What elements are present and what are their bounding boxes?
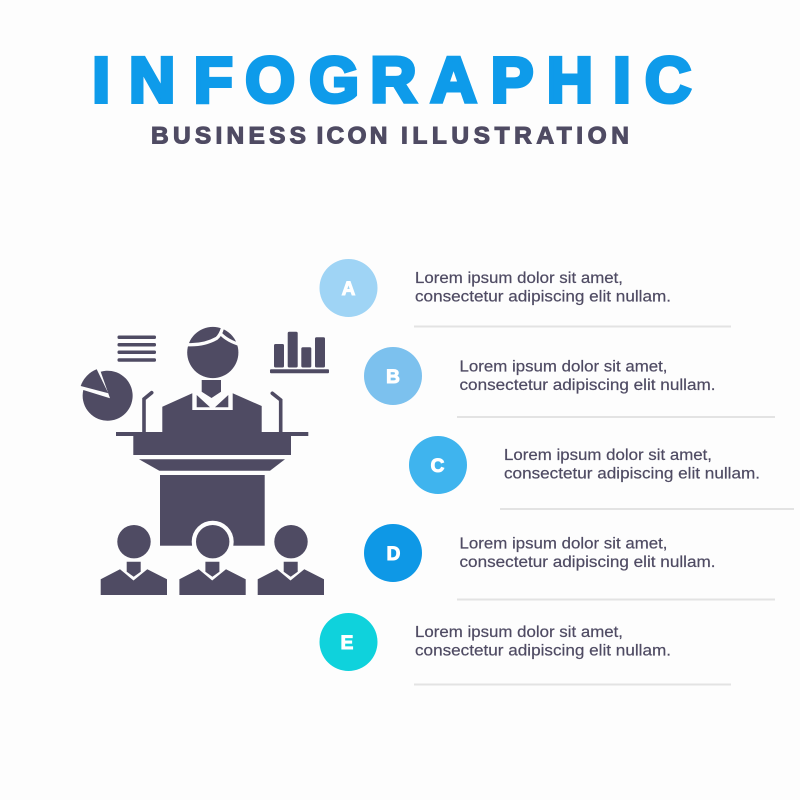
text E: Lorem ipsum dolor sit amet, [415,624,623,641]
text C: Lorem ipsum dolor sit amet, [504,447,712,464]
item E [320,613,731,686]
badge E: E [341,633,353,654]
icon: audience member right [258,525,324,595]
badge C: C [431,456,445,477]
badge A: A [342,279,356,300]
badge D [364,524,422,582]
text D [460,536,716,571]
badge C [409,436,467,494]
badge B [364,347,422,405]
badge B: B [386,367,400,388]
badge D: D [387,544,400,565]
text B: Lorem ipsum dolor sit amet, [460,358,668,376]
text A: Lorem ipsum dolor sit amet, [415,270,623,287]
text E: consectetur adipiscing elit nullam. [415,642,671,660]
text C: consectetur adipiscing elit nullam. [504,466,760,482]
icon: podium [116,432,308,546]
icon: pie chart [81,369,133,421]
icon: audience member left [101,525,167,595]
subtitle: ICON [316,122,388,150]
item D [364,524,775,600]
icon: business speaker at podium with audience [81,327,329,595]
text C [504,447,760,482]
text E [415,624,671,660]
item A [320,259,731,328]
title: INFOGRAPHIC [92,44,691,116]
icon: audience member centre [179,521,246,595]
text A [415,270,671,306]
icon: list lines [118,336,156,362]
subtitle: ILLUSTRATION [401,122,629,150]
text A: consectetur adipiscing elit nullam. [415,288,671,306]
subtitle [151,122,629,150]
item B [364,347,775,418]
text D: Lorem ipsum dolor sit amet, [460,536,668,552]
text B [460,358,716,394]
text B: consectetur adipiscing elit nullam. [460,377,716,394]
badge A [320,259,378,317]
icon: microphones [144,393,281,433]
item C [409,436,794,510]
icon: speaker [162,327,262,433]
icon: bar chart [270,332,329,373]
text D: consectetur adipiscing elit nullam. [460,554,716,571]
badge E [320,613,378,671]
subtitle: BUSINESS [151,122,306,150]
